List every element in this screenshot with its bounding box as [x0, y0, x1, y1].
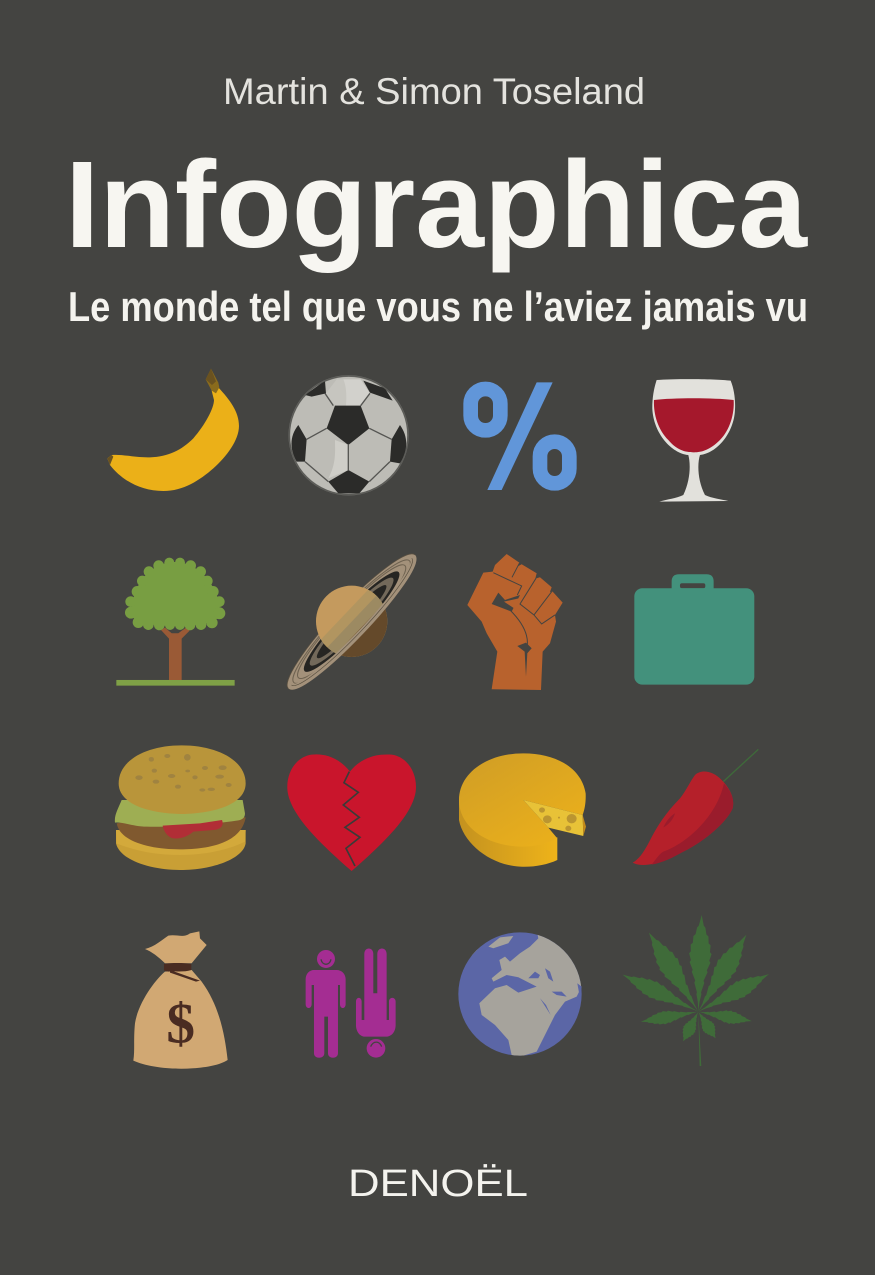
icon: cannabis leaf [619, 915, 773, 1066]
planet [316, 586, 388, 657]
upside-down figure [356, 948, 396, 1058]
trunk [161, 628, 190, 680]
icon: wine glass [652, 379, 735, 502]
publisher logo: DENOËL [348, 1163, 528, 1205]
icon: chili pepper [633, 749, 758, 865]
icon: tree [116, 558, 235, 686]
icon: banana [107, 369, 239, 491]
title: Infographica [65, 137, 809, 274]
icon: briefcase [634, 574, 754, 685]
canopy [125, 558, 225, 630]
icon: money bag [133, 931, 228, 1069]
icon: saturn [286, 554, 416, 690]
icon: cheese wheel [459, 753, 586, 867]
icon: broken heart [287, 754, 416, 871]
ground [116, 680, 235, 686]
icon: football [289, 376, 408, 495]
icon: earth globe [458, 930, 587, 1057]
icon: two pictogram figures [306, 948, 396, 1058]
icon: burger [115, 745, 246, 870]
upright figure [306, 950, 346, 1058]
icon: money bag: $ [166, 993, 195, 1056]
rings back [276, 543, 427, 700]
icon: raised fist [467, 554, 563, 690]
icon: percent sign [471, 382, 569, 490]
authors: Martin & Simon Toseland [223, 71, 645, 112]
rings front [288, 555, 416, 690]
